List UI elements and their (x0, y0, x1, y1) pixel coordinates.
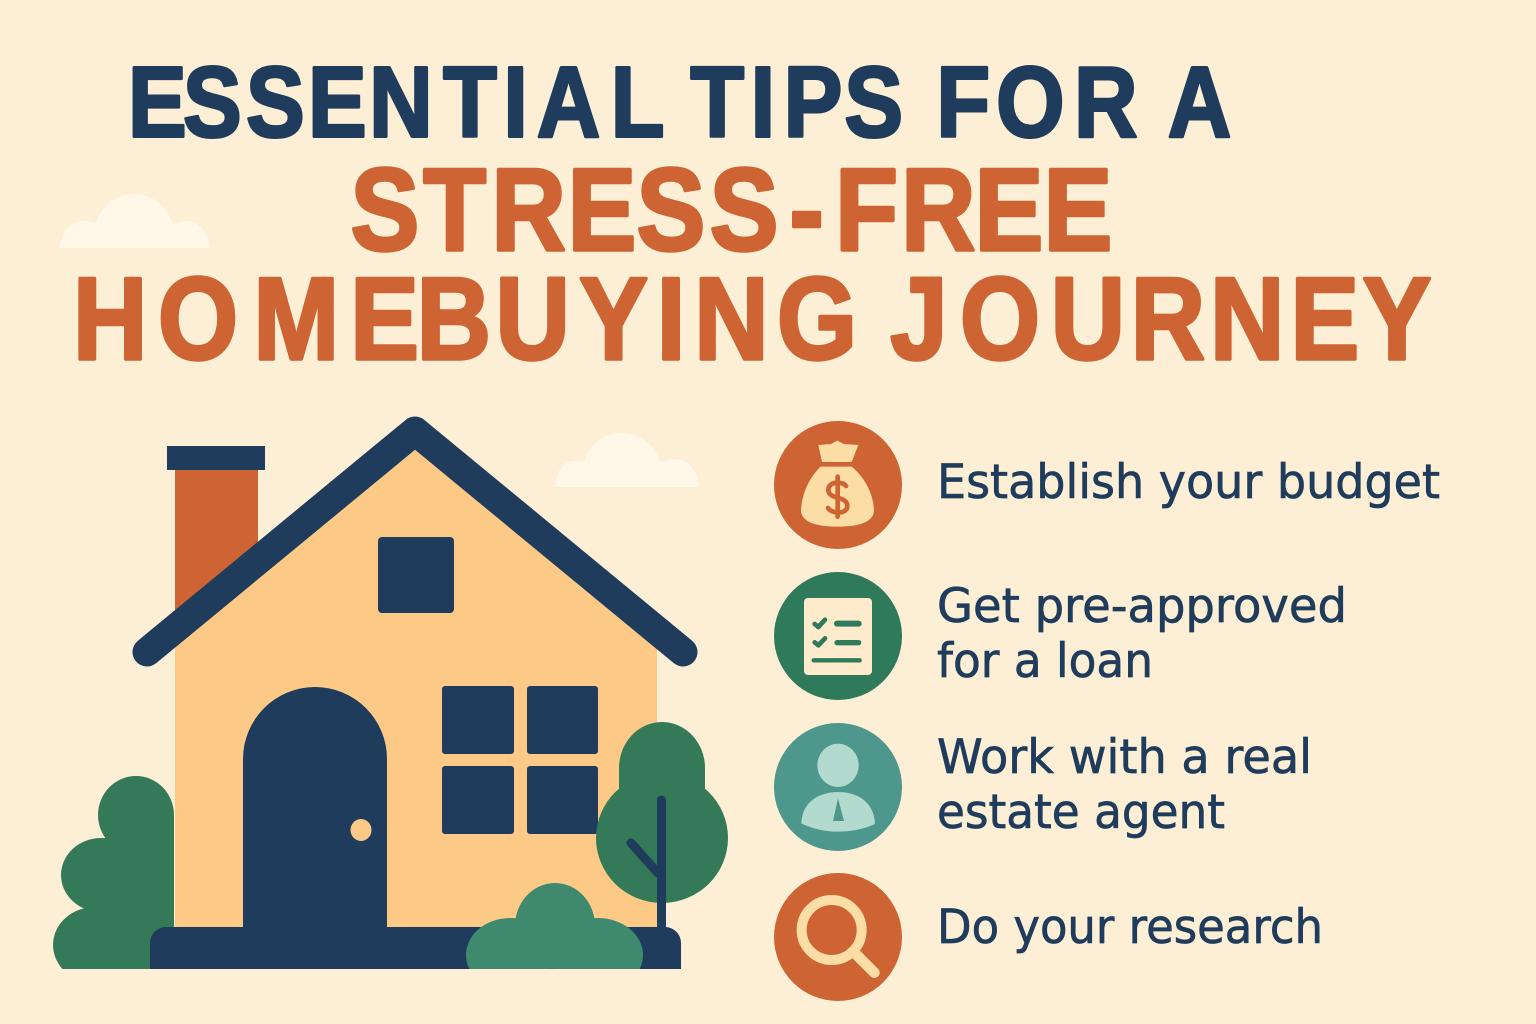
house wall (175, 445, 657, 935)
tip 4: research (774, 873, 1323, 1001)
title line 1: ESSENTIAL TIPS FOR A (128, 46, 1231, 158)
left bush (53, 776, 175, 983)
tip text (937, 730, 1312, 840)
title line 3: HOMEBUYING JOURNEY (73, 254, 1431, 384)
cloud left (60, 194, 210, 248)
tip text: Get pre-approved (937, 579, 1347, 634)
roof (147, 431, 683, 652)
door knob (350, 819, 372, 841)
door (243, 687, 387, 935)
tip text: for a loan (937, 634, 1153, 689)
icon: checklist (774, 572, 902, 700)
tree trunk (631, 800, 662, 930)
icon: money bag (774, 421, 902, 549)
title line 2: STRESS-FREE (351, 145, 1112, 275)
tip text: Work with a real (937, 730, 1312, 785)
attic window (378, 537, 454, 613)
tip 1: budget (774, 421, 1440, 549)
tree canopy (596, 722, 728, 903)
tip 3: agent (774, 723, 1312, 851)
cloud right (555, 433, 699, 487)
title (73, 46, 1431, 384)
tip text: Do your research (937, 900, 1323, 955)
icon: agent (774, 723, 902, 851)
tip 2: pre-approval (774, 572, 1347, 700)
illustration: house (147, 431, 683, 969)
chimney (167, 446, 265, 632)
foundation (150, 927, 681, 969)
tip text: estate agent (937, 785, 1225, 840)
front bush (466, 883, 643, 969)
tip text: Establish your budget (937, 455, 1440, 510)
tree (596, 722, 728, 930)
tip text (937, 579, 1347, 689)
icon: magnifying glass (774, 873, 902, 1001)
front window (442, 686, 598, 834)
